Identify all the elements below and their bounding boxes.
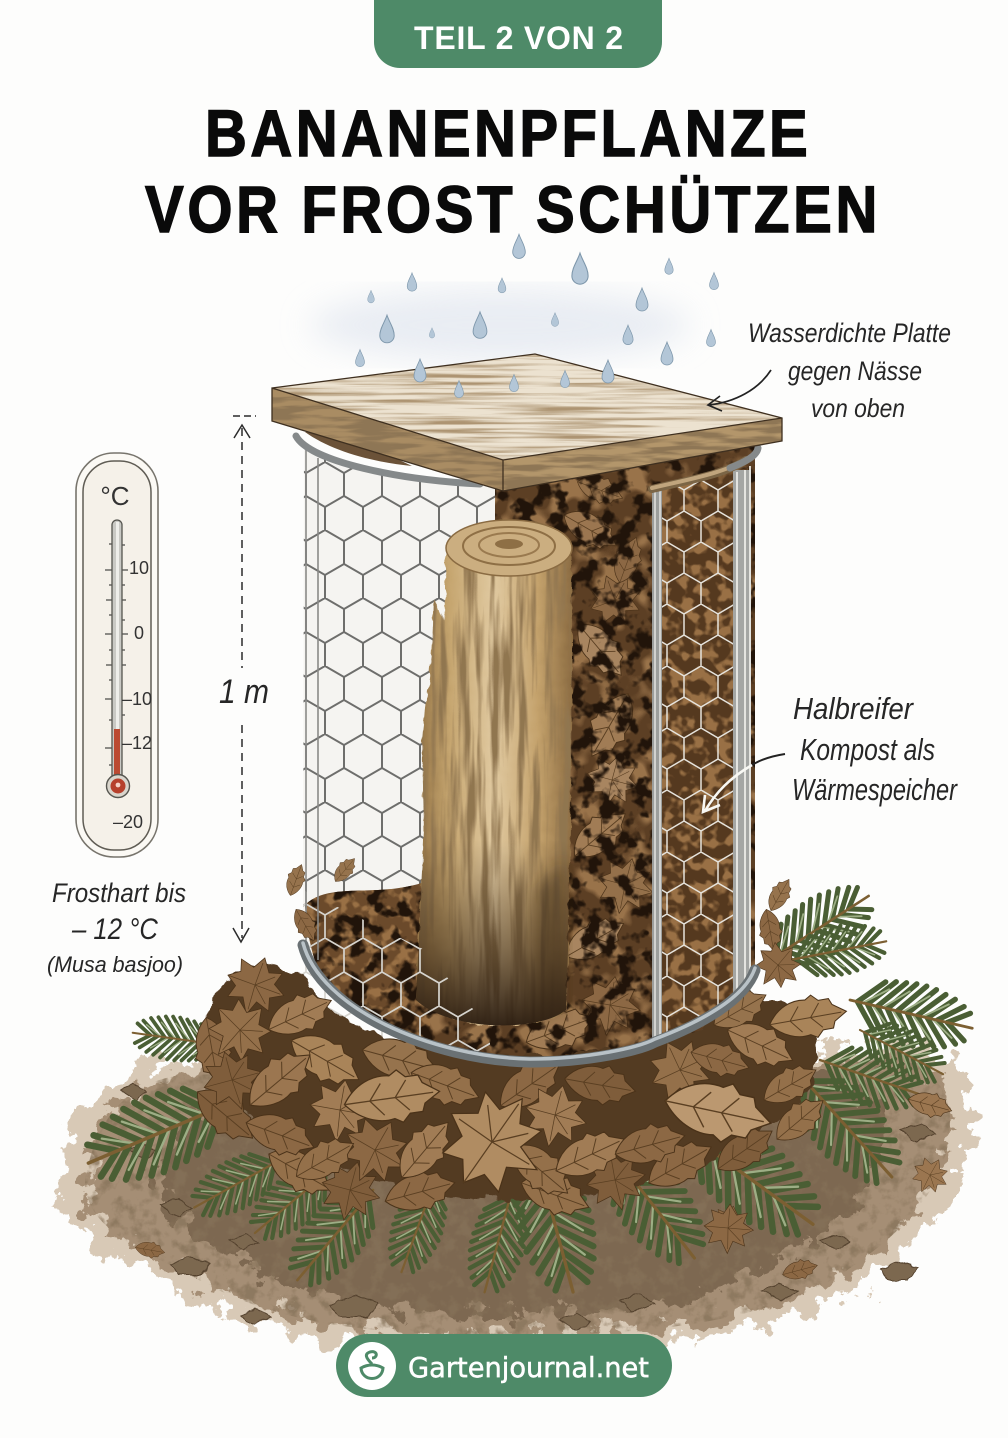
dark wedge under board <box>305 432 412 466</box>
callout: waterproof board: Wasserdichte Platte <box>748 318 951 348</box>
waterproof wooden board <box>272 354 782 491</box>
callout: compost: Halbreifer <box>793 691 914 726</box>
note: frost hardiness: – 12 °C <box>71 913 158 946</box>
compost fill in cage <box>415 440 760 1070</box>
pale blue rain wash <box>310 289 690 361</box>
title: VOR FROST SCHÜTZEN <box>145 174 881 247</box>
top badge: part label <box>374 0 662 68</box>
icon: sprout in pot <box>361 1352 383 1378</box>
front wire mesh at base <box>303 891 490 1052</box>
sprigs of leaves left of cage <box>282 853 797 953</box>
back wire mesh behind trunk <box>303 460 495 948</box>
thermometer: –10 <box>122 689 152 709</box>
side wire edge <box>306 446 318 960</box>
top badge: part label: TEIL 2 VON 2 <box>414 20 623 56</box>
bottom brand badge: Gartenjournal.net <box>408 1351 649 1384</box>
rain drops <box>356 234 718 398</box>
bottom steel ring of cage <box>303 943 755 1062</box>
thermometer <box>76 453 158 857</box>
height dimension arrow: 1 m <box>219 416 269 942</box>
leaf pile around cage base <box>134 933 955 1284</box>
callout: waterproof board <box>708 318 951 423</box>
callout: compost <box>703 691 958 812</box>
thermometer: –12 <box>122 733 152 753</box>
top ring of cage <box>296 436 758 484</box>
callout: compost: Wärmespeicher <box>792 772 958 807</box>
cage interior left <box>303 440 500 1040</box>
thermometer: 10 <box>129 558 149 578</box>
bottom brand badge <box>336 1334 672 1397</box>
note: frost hardiness: (Musa basjoo) <box>47 952 183 977</box>
spruce branches on the ground <box>74 872 979 1301</box>
banana trunk <box>416 520 572 1025</box>
callout: waterproof board: von oben <box>811 393 905 423</box>
note: frost hardiness: Frosthart bis <box>52 878 186 908</box>
callout: waterproof board: gegen Nässe <box>788 356 922 386</box>
compost leaves <box>526 478 652 1050</box>
title: BANANENPFLANZE <box>205 98 811 171</box>
cage door panel <box>650 459 750 1045</box>
title <box>145 98 881 247</box>
thermometer: °C <box>100 481 130 511</box>
thermometer: 0 <box>134 623 144 643</box>
soil ground patch <box>55 1043 975 1350</box>
grey patch at inner cage wall <box>495 482 540 525</box>
thermometer: –20 <box>113 812 143 832</box>
height dimension arrow: 1 m: 1 m <box>219 673 269 711</box>
callout: compost: Kompost als <box>800 732 935 767</box>
compost at the bottom left of cage <box>305 880 430 1045</box>
note: frost hardiness <box>47 878 186 977</box>
